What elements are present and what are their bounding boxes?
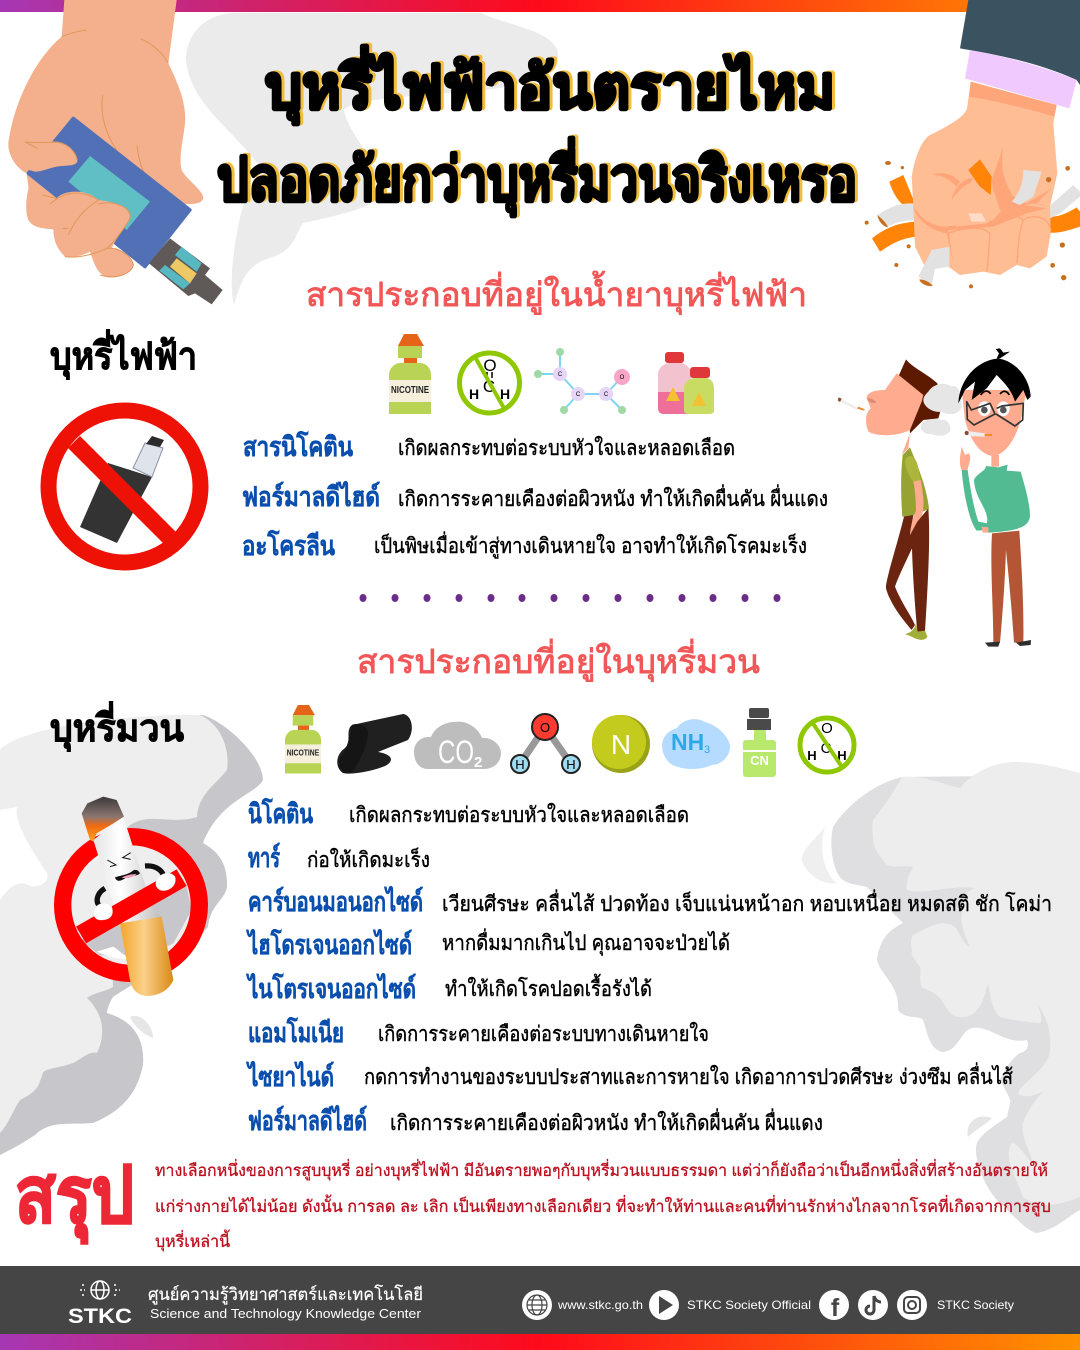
title line 1: บุหรี่ไฟฟ้าอันตรายไหม	[268, 44, 838, 124]
nicotine row: นิโคติน	[248, 797, 313, 829]
hydrogen oxide row: ไฮโดรเจนออกไซด์	[246, 928, 412, 960]
cyanide row	[246, 1061, 1013, 1092]
dotted divider	[360, 594, 780, 602]
icon: website	[522, 1290, 552, 1320]
title line 2: ปลอดภัยกว่าบุหรี่มวนจริงเหรอ	[217, 137, 857, 217]
formaldehyde row: ฟอร์มาลดีไฮด์	[248, 1105, 367, 1136]
tar row	[248, 842, 430, 873]
icon: CO2 cloud	[414, 722, 501, 771]
organisation name English: Science and Technology Knowledge Center	[150, 1306, 422, 1321]
icon: fist crushing cigarettes	[865, 0, 1080, 288]
icon: nicotine bottle small: NICOTINE	[287, 748, 320, 758]
nicotine row	[243, 430, 735, 462]
icon: no formaldehyde: C	[483, 377, 495, 396]
icon: nicotine bottle	[389, 334, 431, 414]
title	[217, 44, 860, 217]
icon: no formaldehyde: O	[483, 356, 497, 375]
nicotine row: สารนิโคติน	[243, 430, 353, 462]
carbon monoxide row	[248, 886, 1052, 917]
icon: no smoking cigarette character	[63, 797, 199, 996]
tar row: ก่อให้เกิดมะเร็ง	[307, 846, 430, 872]
nitrogen oxide row	[246, 972, 652, 1004]
formaldehyde row	[242, 481, 828, 512]
conclusion text	[155, 1159, 1051, 1252]
icon: CO2 cloud: 2	[474, 754, 482, 771]
nitrogen oxide row: ไนโตรเจนออกไซด์	[246, 972, 416, 1004]
icon: no formaldehyde: H	[469, 386, 479, 402]
icon: facebook	[819, 1290, 849, 1322]
heading: cigarette ingredients: สารประกอบที่อยู่ในบุหรี่มวน	[357, 639, 760, 682]
nicotine row: เกิดผลกระทบต่อระบบหัวใจและหลอดเลือด	[398, 436, 735, 460]
icon: STKC atom logo	[80, 1281, 120, 1299]
icon: tiktok	[858, 1290, 888, 1320]
icon: cyanide bottle	[743, 708, 776, 777]
icon: acrolein molecule: C	[576, 392, 581, 398]
icon: no formaldehyde: H	[500, 386, 510, 402]
icon: CO2 cloud: CO	[438, 734, 474, 770]
title line 1: บุหรี่ไฟฟ้าอันตรายไหม	[265, 45, 835, 125]
icon: facebook: f	[831, 1294, 840, 1322]
ammonia row	[248, 1016, 709, 1048]
title line 2: ปลอดภัยกว่าบุหรี่มวนจริงเหรอ	[220, 136, 860, 216]
nicotine row	[248, 797, 689, 829]
icon: water molecule	[511, 714, 580, 773]
nicotine row: เกิดผลกระทบต่อระบบหัวใจและหลอดเลือด	[349, 803, 689, 827]
icon: acrolein molecule	[534, 348, 630, 414]
ammonia row: เกิดการระคายเคืองต่อระบบทางเดินหายใจ	[378, 1022, 709, 1046]
social text: STKC Society	[937, 1298, 1014, 1312]
icon: ammonia cloud: NH	[671, 729, 704, 755]
ammonia row: แอมโมเนีย	[248, 1016, 344, 1048]
formaldehyde row	[248, 1105, 823, 1136]
icon: nicotine bottle small	[285, 705, 321, 774]
icon: no vape sign	[48, 410, 200, 562]
footer band	[0, 1266, 1080, 1350]
organisation name Thai: ศูนย์ความรู้วิทยาศาสตร์และเทคโนโลยี	[148, 1284, 423, 1305]
heading: conclusion: สรุป	[15, 1151, 134, 1244]
top gradient bar	[0, 0, 1080, 12]
e-cigarette ingredient list	[242, 430, 828, 561]
website text: www.stkc.go.th	[557, 1298, 643, 1312]
icon: warning chemical bottles	[658, 352, 714, 414]
icon: nitrogen ball: N	[611, 729, 631, 760]
youtube text: STKC Society Official	[687, 1298, 811, 1312]
heading: cigarette: บุหรี่มวน	[50, 701, 184, 752]
formaldehyde row: เกิดการระคายเคืองต่อผิวหนัง ทำให้เกิดผื่นคัน ผื่นแดง	[390, 1108, 823, 1135]
formaldehyde row: เกิดการระคายเคืองต่อผิวหนัง ทำให้เกิดผื่นคัน ผื่นแดง	[398, 484, 828, 511]
icon: cyanide bottle: CN	[750, 753, 769, 768]
icon: no formaldehyde small	[800, 718, 854, 772]
icon: water molecule: H	[566, 757, 576, 772]
STKC logo text: STKC	[68, 1305, 132, 1328]
conclusion text: บุหรี่เหล่านี้	[155, 1229, 230, 1252]
icon: acrolein molecule: O	[620, 375, 625, 381]
background smoke: top	[186, 13, 558, 305]
icon: acrolein molecule: C	[604, 392, 609, 398]
icon: no formaldehyde small: C	[821, 740, 832, 757]
icon: no formaldehyde small: H	[807, 748, 817, 763]
background smoke: lower left	[0, 715, 263, 1155]
icon: water molecule: O	[540, 720, 550, 735]
icon: no formaldehyde small: H	[837, 748, 847, 763]
formaldehyde row: ฟอร์มาลดีไฮด์	[242, 481, 380, 512]
heading: e-liquid ingredients: สารประกอบที่อยู่ในน้ำยาบุหรี่ไฟฟ้า	[306, 271, 807, 315]
icon: youtube play	[649, 1290, 679, 1320]
hydrogen oxide row	[246, 928, 730, 960]
icon: instagram	[897, 1290, 927, 1320]
icon: ammonia cloud: 3	[704, 744, 710, 756]
acrolein row: อะโครลีน	[242, 529, 335, 561]
icon: left hand holding vape	[8, 0, 223, 304]
icon: tar	[337, 714, 412, 774]
icon: acrolein molecule: C	[558, 372, 563, 378]
icon: no formaldehyde small: O	[821, 720, 833, 737]
acrolein row	[242, 529, 807, 561]
acrolein row: เป็นพิษเมื่อเข้าสู่ทางเดินหายใจ อาจทำให้เกิดโรคมะเร็ง	[374, 531, 807, 559]
heading: e-cigarette: บุหรี่ไฟฟ้า	[50, 329, 197, 380]
icon: nicotine bottle: NICOTINE	[391, 385, 429, 396]
icon: no formaldehyde	[460, 353, 520, 413]
hydrogen oxide row: หากดื่มมากเกินไป คุณอาจจะป่วยได้	[442, 928, 730, 956]
icon: ammonia cloud	[662, 719, 730, 769]
icon: two men smoking	[838, 348, 1031, 647]
conclusion text: แก่ร่างกายได้ไม่น้อย ดังนั้น การลด ละ เลิก เป็นเพียงทางเลือกเดียว ที่จะทำให้ท่านและคนที่ท่านรักห่างไกลจากโรคที่เกิดจากการสูบ	[155, 1194, 1051, 1217]
carbon monoxide row: คาร์บอนมอนอกไซด์	[248, 886, 423, 917]
tar row: ทาร์	[248, 842, 280, 873]
conclusion text: ทางเลือกหนึ่งของการสูบบุหรี่ อย่างบุหรี่ไฟฟ้า มีอันตรายพอๆกับบุหรี่มวนแบบธรรมดา แต่ว่าก็ยังถือว่าเป็นอีกหนึ่งสิ่งที่สร้างอันตรายให้	[155, 1159, 1048, 1181]
nitrogen oxide row: ทำให้เกิดโรคปอดเรื้อรังได้	[445, 974, 652, 1001]
cigarette ingredient list	[246, 797, 1052, 1136]
icon: nitrogen ball	[592, 715, 650, 773]
cyanide row: ไซยาไนด์	[246, 1061, 334, 1092]
icon: water molecule: H	[515, 757, 525, 772]
background smoke: right	[802, 762, 1080, 1233]
